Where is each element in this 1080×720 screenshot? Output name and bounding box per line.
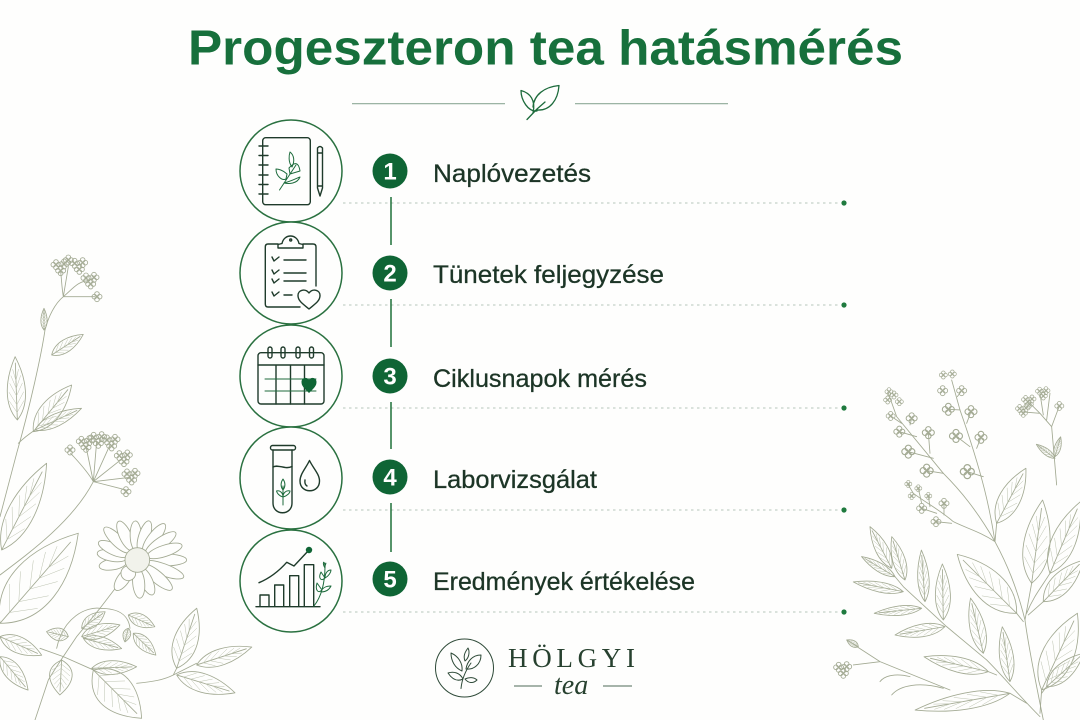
- step 3: Ciklusnapok mérés: [240, 325, 847, 427]
- badge 3: [372, 358, 408, 394]
- logo: Hölgyi tea: [436, 639, 635, 701]
- step 4: Laborvizsgálat: [240, 427, 847, 529]
- connector line 3-4: [390, 402, 392, 449]
- badge 2: [372, 256, 408, 290]
- badge 3: 3: [383, 364, 397, 390]
- icon: test tube and droplet: [240, 427, 342, 529]
- badge 5: 5: [383, 566, 397, 594]
- botanical illustration: right: [834, 370, 1080, 720]
- icon: rising bar chart with plant: [240, 530, 342, 632]
- dotted connector 2: [343, 302, 847, 308]
- badge 2: 2: [383, 260, 397, 288]
- dotted connector 1: [343, 200, 847, 206]
- logo wordmark: HÖLGYI: [508, 643, 635, 673]
- logo emblem: [436, 639, 494, 697]
- icon: notebook with plant and pencil: [240, 120, 342, 222]
- badge 4: [372, 460, 408, 494]
- step 5: Eredmények értékelése: [240, 530, 847, 632]
- icon: clipboard checklist with heart: [240, 222, 342, 324]
- label 4: Laborvizsgálat: [433, 466, 597, 494]
- badge 1: 1: [383, 158, 397, 186]
- icon: calendar with heart: [240, 325, 342, 427]
- step 1: Naplóvezetés: [240, 120, 847, 222]
- logo script word: tea: [554, 670, 588, 701]
- step 2: Tünetek feljegyzése: [240, 222, 847, 324]
- label 3: Ciklusnapok mérés: [433, 365, 647, 393]
- connector line 1-2: [390, 197, 392, 245]
- title: Progeszteron tea hatásmérés: [188, 22, 903, 76]
- badge 1: [372, 154, 408, 188]
- label 5: Eredmények értékelése: [433, 568, 695, 596]
- connector line 4-5: [390, 503, 392, 552]
- label 1: Naplóvezetés: [433, 160, 591, 188]
- dotted connector 5: [343, 609, 847, 615]
- dotted connector 3: [343, 405, 847, 411]
- badge 4: 4: [383, 464, 397, 492]
- title divider with leaf: [352, 86, 728, 120]
- botanical illustration: left: [0, 255, 254, 720]
- label 2: Tünetek feljegyzése: [433, 261, 664, 289]
- badge 5: [372, 562, 408, 596]
- icon: daisy flower: [96, 519, 187, 599]
- connector line 2-3: [390, 299, 392, 347]
- dotted connector 4: [343, 507, 847, 513]
